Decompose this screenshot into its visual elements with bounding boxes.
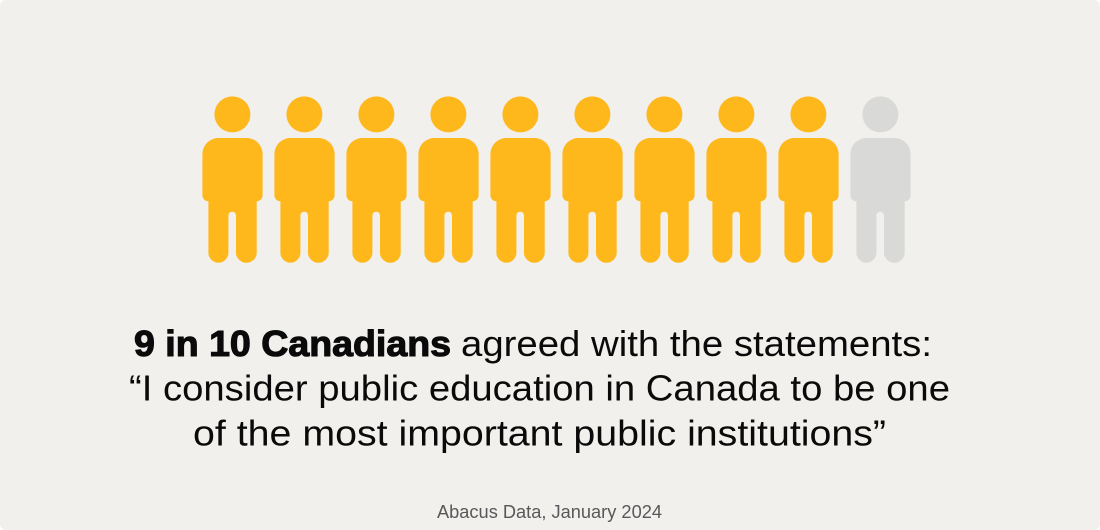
bold lead-in: 9 in 10 Canadians [134, 323, 451, 364]
icon: person 6 [562, 96, 623, 263]
icon: person 3 [346, 96, 407, 263]
icon: person 4 [418, 96, 479, 263]
icon: person 5 [490, 96, 551, 263]
icon: person 8 [706, 96, 767, 263]
statement text [129, 323, 950, 454]
line 1: agreed with the statements: [461, 323, 932, 364]
icon: person 9 [778, 96, 839, 263]
line 2: “I consider public education in Canada to be one [129, 368, 950, 408]
icon: person 2 [274, 96, 335, 263]
icon: person 1 [202, 96, 263, 263]
icon: person 10 (grey) [850, 96, 911, 263]
source note: Abacus Data, January 2024 [437, 502, 662, 522]
pictogram: 9 of 10 people highlighted [202, 96, 911, 263]
line 3: of the most important public institutions” [193, 412, 886, 454]
icon: person 7 [634, 96, 695, 263]
